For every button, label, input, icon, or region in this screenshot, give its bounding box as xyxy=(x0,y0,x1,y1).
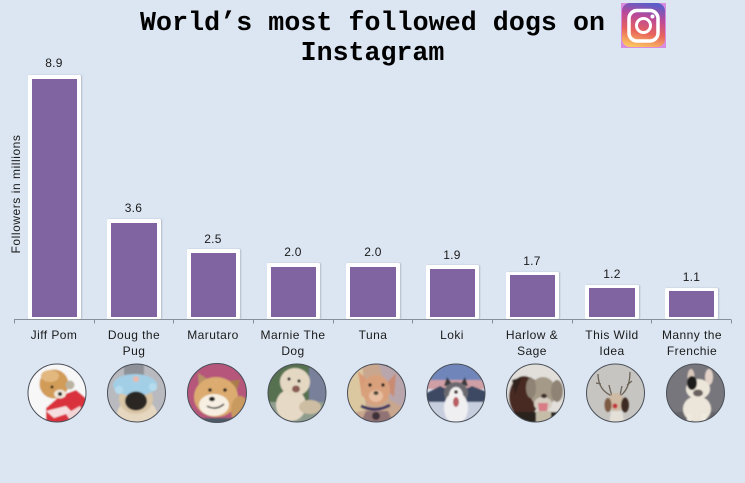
bar chart xyxy=(28,56,718,319)
photo: Jiff Pom xyxy=(28,364,86,422)
photo: Manny the Frenchie xyxy=(666,364,725,422)
bar: Doug the Pug 3.6 xyxy=(107,201,161,319)
category labels: Sage xyxy=(517,344,547,358)
category labels: Marutaro xyxy=(187,328,239,342)
bar: Manny the Frenchie 1.1: 1.1 xyxy=(683,270,700,284)
x axis xyxy=(14,320,732,324)
photo: This Wild Idea xyxy=(586,364,645,424)
bar: Jiff Pom 8.9 xyxy=(28,56,81,319)
title xyxy=(140,8,605,68)
icon: Instagram logo xyxy=(621,3,666,48)
category labels: This Wild xyxy=(585,328,639,342)
bar: Harlow and Sage 1.7 xyxy=(506,254,559,319)
category labels: Doug the xyxy=(108,328,160,342)
category labels: Pug xyxy=(123,344,145,358)
category labels: Manny the xyxy=(662,328,722,342)
bar: Marnie The Dog 2.0 xyxy=(267,245,320,319)
bar: Loki 1.9: 1.9 xyxy=(443,248,461,262)
title: World’s most followed dogs on xyxy=(140,8,605,38)
bar: Jiff Pom 8.9: 8.9 xyxy=(45,56,63,70)
category labels: Frenchie xyxy=(667,344,717,358)
category labels: Tuna xyxy=(359,328,387,342)
bar: Marutaro 2.5 xyxy=(187,232,240,319)
photo: Marnie The Dog xyxy=(266,362,328,424)
bar: Marutaro 2.5: 2.5 xyxy=(204,232,222,246)
bar: This Wild Idea 1.2 xyxy=(585,267,639,319)
category labels: Loki xyxy=(440,328,464,342)
photo: Doug the Pug xyxy=(107,364,166,422)
photo: Harlow and Sage xyxy=(506,364,565,422)
bar: Manny the Frenchie 1.1 xyxy=(665,270,718,319)
photo: Tuna xyxy=(347,364,406,422)
category labels: Marnie The xyxy=(261,328,325,342)
bar: Doug the Pug 3.6: 3.6 xyxy=(125,201,142,215)
category labels: Dog xyxy=(281,344,305,358)
y-axis label: Followers in millions xyxy=(9,135,23,253)
category labels: Harlow & xyxy=(506,328,558,342)
title: Instagram xyxy=(301,38,444,68)
bar: Tuna 2.0: 2.0 xyxy=(364,245,382,259)
bar: Harlow and Sage 1.7: 1.7 xyxy=(523,254,541,268)
category labels xyxy=(31,328,722,358)
category labels: Jiff Pom xyxy=(31,328,77,342)
bar: Tuna 2.0 xyxy=(346,245,400,319)
photo: Loki xyxy=(425,362,487,424)
bar: Loki 1.9 xyxy=(426,248,479,319)
bar: This Wild Idea 1.2: 1.2 xyxy=(603,267,621,281)
bar: Marnie The Dog 2.0: 2.0 xyxy=(284,245,302,259)
photo: Marutaro xyxy=(187,363,247,423)
category labels: Idea xyxy=(599,344,625,358)
